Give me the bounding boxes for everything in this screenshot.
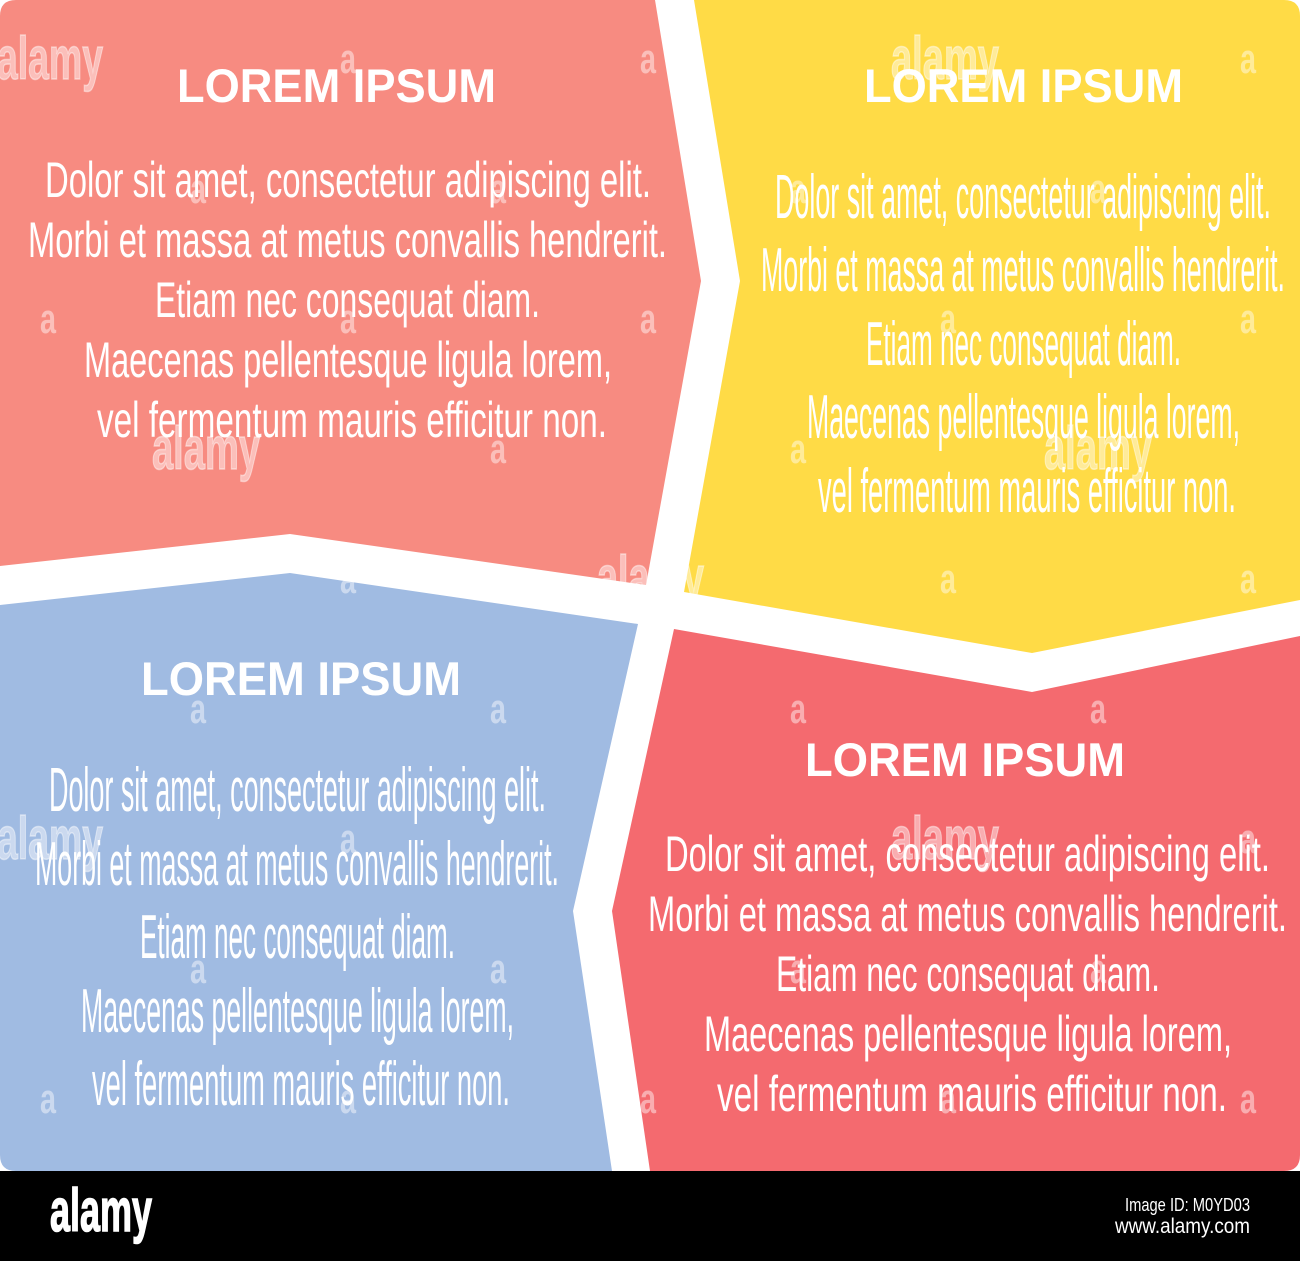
panel: red bottom-right — [612, 629, 1300, 1171]
watermarks: alamy — [152, 415, 260, 482]
panel: blue bottom-left: vel fermentum mauris efficitur non. — [92, 1050, 510, 1119]
watermarks: a — [340, 815, 356, 862]
watermarks: alamy — [1044, 415, 1152, 482]
watermarks: a — [640, 35, 656, 82]
watermarks: a — [340, 35, 356, 82]
watermarks: alamy — [0, 25, 103, 92]
watermarks: a — [490, 425, 506, 472]
footer logo: alamy — [50, 1177, 152, 1244]
shape: red arrow panel — [612, 629, 1300, 1171]
text block: blue panel — [35, 756, 559, 1119]
heading: salmon panel: LOREM IPSUM — [177, 59, 496, 112]
panel: blue bottom-left — [0, 573, 638, 1171]
watermarks: alamy — [891, 25, 999, 92]
watermarks: a — [340, 1075, 356, 1122]
panel: blue bottom-left: Maecenas pellentesque ligula lorem, — [81, 977, 514, 1046]
watermarks: a — [940, 295, 956, 342]
text block: blue panel: Etiam nec consequat diam. — [140, 903, 455, 972]
heading: yellow panel: LOREM IPSUM — [864, 59, 1183, 112]
watermarks: a — [1090, 945, 1106, 992]
watermarks: a — [940, 1075, 956, 1122]
watermarks: alamy — [597, 544, 704, 611]
panel: yellow top-right — [684, 0, 1300, 653]
watermarks: a — [940, 555, 956, 602]
watermarks: a — [1240, 295, 1256, 342]
watermarks: a — [490, 685, 506, 732]
watermarks: a — [40, 1075, 56, 1122]
watermarks: alamy — [0, 805, 103, 872]
footer bar — [0, 1171, 1300, 1261]
watermarks: a — [790, 165, 806, 212]
watermarks: a — [640, 295, 656, 342]
heading: blue panel: LOREM IPSUM — [141, 652, 461, 705]
shape: salmon arrow panel — [0, 0, 701, 585]
watermarks: a — [190, 165, 206, 212]
watermarks: a — [490, 165, 506, 212]
text: Morbi et massa at metus convallis hendrerit. — [35, 830, 559, 899]
watermarks: a — [490, 945, 506, 992]
watermarks: a — [1240, 35, 1256, 82]
panel: salmon top-left — [0, 0, 701, 585]
watermarks: a — [1090, 165, 1106, 212]
watermarks: a — [790, 685, 806, 732]
text block: salmon panel: Dolor sit amet, consectetur adipiscing elit. — [45, 152, 651, 208]
watermarks: a — [340, 295, 356, 342]
watermarks: a — [40, 295, 56, 342]
watermarks: a — [190, 685, 206, 732]
text block: salmon panel — [28, 152, 667, 448]
watermarks: a — [790, 945, 806, 992]
panel: blue bottom-left: Dolor sit amet, consectetur adipiscing elit. — [49, 756, 546, 825]
text block: salmon panel: Maecenas pellentesque ligula lorem, — [84, 332, 612, 388]
text block: yellow panel — [761, 163, 1285, 526]
text block: salmon panel: Etiam nec consequat diam. — [155, 272, 540, 328]
heading: red panel: LOREM IPSUM — [805, 733, 1125, 786]
shape: yellow arrow panel — [684, 0, 1300, 653]
watermarks: alamy — [891, 805, 999, 872]
text block: red panel — [648, 826, 1287, 1122]
watermarks: a — [1240, 815, 1256, 862]
watermarks: a — [190, 945, 206, 992]
watermarks: a — [1240, 1075, 1256, 1122]
watermarks: a — [790, 425, 806, 472]
footer image id: Image ID: M0YD03 — [1125, 1195, 1250, 1215]
text block: salmon panel: Morbi et massa at metus convallis hendrerit. — [28, 212, 667, 268]
shape: blue arrow panel — [0, 573, 638, 1171]
watermarks: a — [340, 555, 356, 602]
footer website: www.alamy.com — [1114, 1215, 1250, 1238]
text block: salmon panel: vel fermentum mauris efficitur non. — [97, 392, 607, 448]
watermarks: a — [1240, 555, 1256, 602]
watermarks: a — [640, 1075, 656, 1122]
watermarks: a — [1090, 685, 1106, 732]
